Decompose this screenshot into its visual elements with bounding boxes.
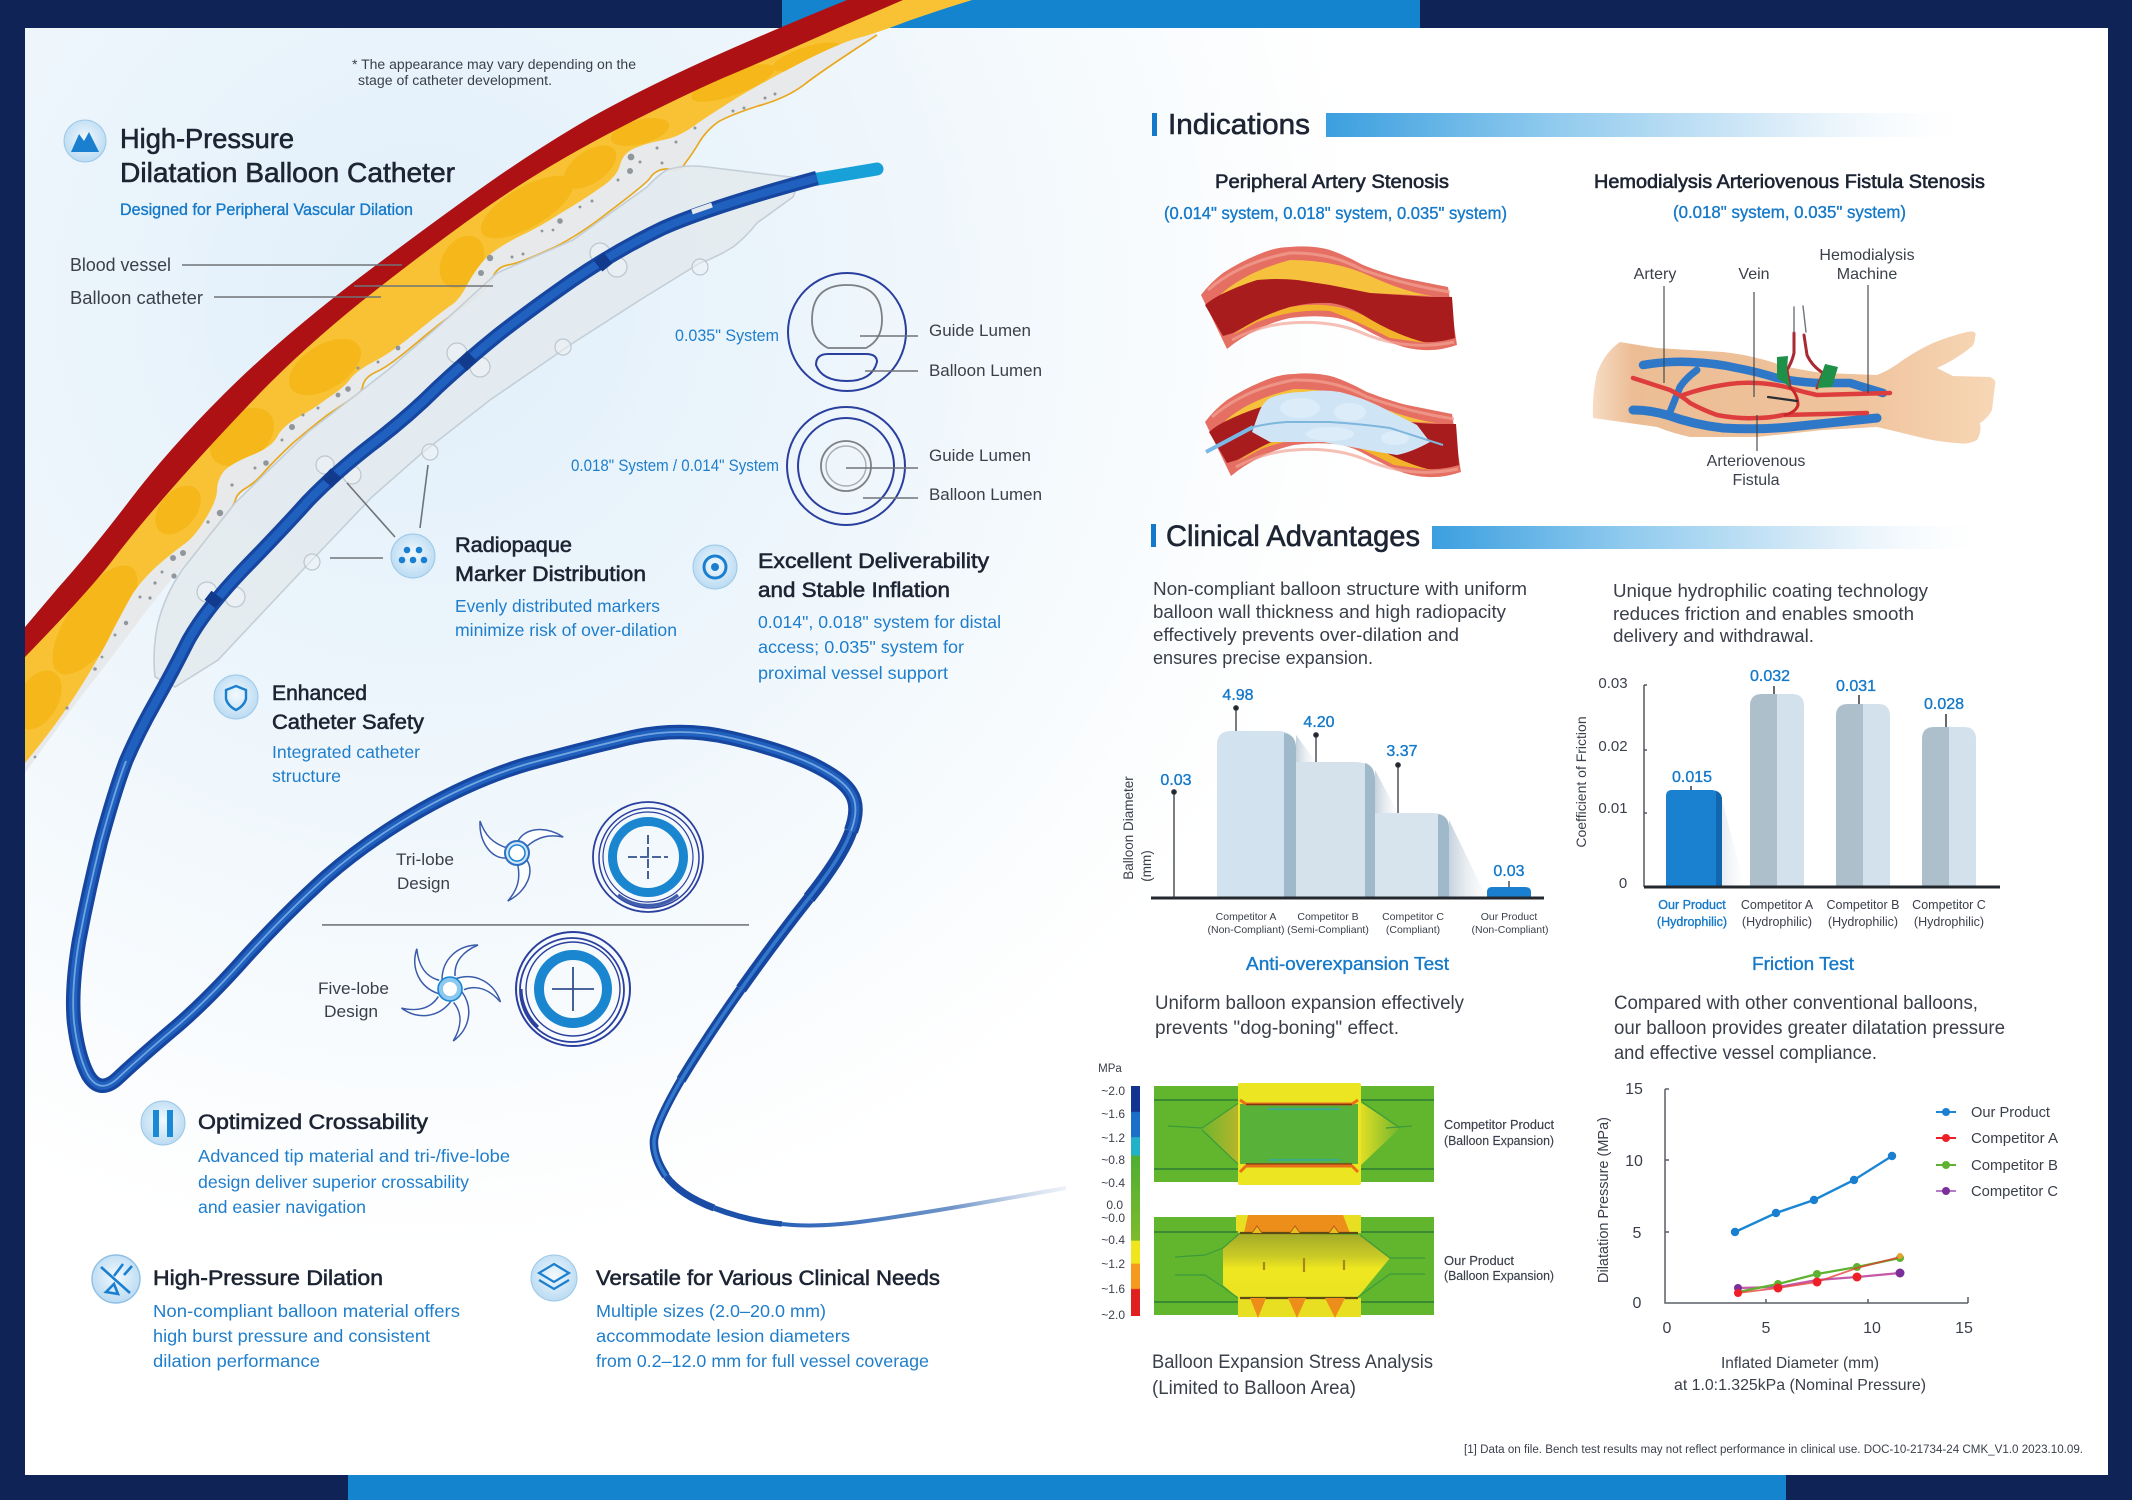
icon: five-lobe balloon disc: [516, 932, 630, 1046]
value labels: 0.028: [1924, 696, 1964, 713]
axis numbers: 15: [1625, 1081, 1643, 1098]
bar shadow: [1722, 800, 1745, 887]
tri-lobe design: [396, 802, 703, 912]
axis numbers: 5: [1762, 1320, 1771, 1337]
label: competitor product: (Balloon Expansion): [1444, 1134, 1554, 1148]
bar: competitor A: [1217, 731, 1296, 898]
category labels: [1657, 898, 1986, 929]
icon: tri-lobe balloon disc: [593, 802, 703, 912]
text: dilatation pressure description: [1614, 993, 2005, 1064]
category labels: Our Product: [1658, 898, 1726, 912]
feature: radiopaque marker distribution: minimize risk of over-dilation: [455, 620, 677, 640]
feature: optimized crossability: [141, 1101, 510, 1217]
value labels: [1672, 668, 1964, 786]
heading: product name: Dilatation Balloon Catheter: [120, 157, 455, 188]
stress analysis: colour scale: MPa: [1098, 1063, 1122, 1075]
balloon markers: [197, 243, 708, 607]
text: dilatation pressure description: Compared with other conventional balloons,: [1614, 993, 1978, 1014]
arm labels: [1634, 247, 1915, 489]
cross section: 0.035 inch system: [675, 273, 1042, 391]
top blue bar: [782, 0, 1420, 29]
label: our product: [1444, 1254, 1554, 1283]
icon: parallel bars: [141, 1101, 185, 1145]
text: non-compliant description: Non-compliant balloon structure with uniform: [1153, 579, 1527, 599]
y axis label: Coefficient of Friction: [1573, 716, 1589, 848]
feature: radiopaque marker distribution: Marker Distribution: [455, 563, 646, 586]
feature: high-pressure dilation: [92, 1255, 460, 1371]
category labels: (Hydrophilic): [1914, 915, 1984, 929]
section heading: indications: Indications: [1168, 109, 1310, 141]
feature: excellent deliverability: [693, 545, 1001, 683]
bar shadows: [1296, 735, 1487, 898]
series: competitor C: [1734, 1268, 1904, 1292]
cross section: 0.018 / 0.014 inch system: Balloon Lumen: [929, 485, 1042, 504]
category labels: Our Product: [1481, 911, 1537, 923]
category labels: (Semi-Compliant): [1287, 924, 1369, 936]
five-lobe design: Design: [324, 1002, 378, 1021]
cross section: 0.035 inch system: Guide Lumen: [929, 321, 1031, 340]
category labels: (Hydrophilic): [1828, 915, 1898, 929]
stress analysis: colour scale: ~0.0: [1101, 1211, 1125, 1225]
illustration: forearm with fistula: [1593, 306, 1995, 444]
subtitle: Designed for Peripheral Vascular Dilation: [120, 200, 413, 219]
five-lobe design: [318, 932, 630, 1046]
axis numbers: 0: [1663, 1320, 1672, 1337]
category labels: Competitor B: [1297, 911, 1359, 923]
value labels: 0.03: [1160, 772, 1192, 789]
indication: peripheral artery stenosis: Peripheral Artery Stenosis: [1215, 172, 1449, 193]
catheter tip: [800, 169, 877, 182]
icon: mountains: [64, 120, 106, 162]
arm labels: Fistula: [1732, 472, 1780, 489]
feature: enhanced catheter safety: Integrated catheter: [272, 742, 420, 762]
icon: shield: [214, 675, 258, 719]
text: hydrophilic coating description: reduces friction and enables smooth: [1613, 604, 1914, 624]
category labels: (Compliant): [1386, 924, 1440, 936]
fat layer: [25, 0, 972, 763]
feature: excellent deliverability: access; 0.035" system for: [758, 637, 964, 657]
arm labels: Vein: [1738, 266, 1770, 283]
heading: product name: [120, 123, 455, 188]
x axis label: [1674, 1355, 1926, 1394]
feature: enhanced catheter safety: Catheter Safety: [272, 711, 425, 734]
stress analysis: competitor balloon heatmap: [1154, 1083, 1434, 1185]
tri-lobe design: Tri-lobe: [396, 850, 454, 869]
bar: our product: [1487, 887, 1531, 898]
bar chart: friction test: [1573, 668, 2000, 974]
series: competitor B: [1738, 1254, 1904, 1292]
callouts: blood vessel and balloon catheter labels: Balloon catheter: [70, 288, 203, 308]
value ticks: [1691, 686, 1946, 790]
feature: enhanced catheter safety: structure: [272, 766, 341, 786]
chart caption: Friction Test: [1752, 954, 1854, 974]
cross section: 0.035 inch system: Balloon Lumen: [929, 361, 1042, 380]
indication: hemodialysis arteriovenous fistula stenosis: (0.018" system, 0.035" system): [1673, 202, 1906, 222]
bar: competitor A: [1750, 694, 1804, 887]
feature: optimized crossability: and easier navigation: [198, 1197, 366, 1217]
legend: Competitor B: [1971, 1157, 2058, 1174]
text: non-compliant description: effectively prevents over-dilation and: [1153, 625, 1459, 645]
stress analysis: colour scale: [1098, 1063, 1140, 1322]
text: uniform expansion description: Uniform balloon expansion effectively: [1155, 993, 1464, 1014]
feature: optimized crossability: design deliver superior crossability: [198, 1172, 469, 1192]
x axis label: at 1.0:1.325kPa (Nominal Pressure): [1674, 1377, 1926, 1394]
text: non-compliant description: ensures precise expansion.: [1153, 648, 1373, 668]
y axis label: Balloon Diameter: [1121, 776, 1136, 880]
stress analysis: colour scale: ~1.6: [1101, 1107, 1125, 1121]
note: appearance disclaimer: [352, 57, 636, 88]
x axis label: Inflated Diameter (mm): [1721, 1355, 1879, 1372]
callouts: blood vessel and balloon catheter labels: Blood vessel: [70, 255, 171, 275]
arm labels: Hemodialysis: [1819, 247, 1915, 264]
cross section: 0.035 inch system: 0.035" System: [675, 326, 779, 345]
text: non-compliant description: balloon wall thickness and high radiopacity: [1153, 602, 1506, 622]
feature: versatile clinical needs: accommodate lesion diameters: [596, 1326, 850, 1346]
stress analysis: colour scale: ~1.2: [1101, 1257, 1125, 1271]
axis tick labels: 0.01: [1598, 800, 1628, 817]
label: our product: (Balloon Expansion): [1444, 1269, 1554, 1283]
title block: [64, 120, 455, 219]
caption: stress analysis: Balloon Expansion Stress Analysis: [1152, 1352, 1433, 1373]
heading: product name: High-Pressure: [120, 123, 294, 154]
axis numbers: [1625, 1081, 1973, 1337]
section heading: clinical advantages: Clinical Advantages: [1166, 520, 1420, 553]
bottom blue bar: [348, 1475, 1786, 1500]
axis tick labels: 0: [1619, 875, 1627, 892]
label: our product: Our Product: [1444, 1254, 1515, 1268]
arm labels: Arteriovenous: [1707, 453, 1805, 470]
value labels: 4.98: [1222, 687, 1254, 704]
five-lobe design: Five-lobe: [318, 979, 389, 998]
indication: hemodialysis arteriovenous fistula stenosis: Hemodialysis Arteriovenous Fistula Stenosis: [1594, 172, 1985, 193]
bar: competitor C: [1375, 813, 1449, 898]
section heading: clinical advantages: [1151, 520, 1982, 553]
text: hydrophilic coating description: Unique hydrophilic coating technology: [1613, 581, 1928, 601]
axes: [1644, 685, 2000, 888]
plaque dots: [34, 92, 777, 758]
label: competitor product: Competitor Product: [1444, 1118, 1555, 1132]
stress analysis: colour scale: 0.0: [1106, 1198, 1123, 1212]
plaque layer: [25, 0, 877, 773]
bar: competitor B: [1296, 762, 1375, 898]
stress analysis: colour scale: ~0.4: [1101, 1176, 1125, 1190]
feature: enhanced catheter safety: Enhanced: [272, 682, 367, 705]
category labels: Competitor A: [1741, 898, 1814, 912]
series: our product: [1731, 1152, 1896, 1236]
category labels: (Hydrophilic): [1742, 915, 1812, 929]
cross section: 0.018 / 0.014 inch system: 0.018" System / 0.014" System: [571, 456, 779, 475]
indication: hemodialysis arteriovenous fistula stenosis: [1593, 172, 1995, 489]
feature: versatile clinical needs: Versatile for Various Clinical Needs: [596, 1266, 940, 1290]
stress analysis: colour scale: ~0.4: [1101, 1233, 1125, 1247]
axes: [1665, 1089, 1968, 1303]
bar: competitor C: [1922, 727, 1976, 887]
feature: radiopaque marker distribution: Radiopaque: [455, 534, 572, 557]
illustration: artery with inflated balloon: [1205, 373, 1461, 477]
callouts: blood vessel and balloon catheter labels: [70, 255, 493, 308]
legend: Competitor A: [1971, 1130, 2058, 1147]
bar chart: anti-overexpansion test: [1121, 687, 1549, 974]
feature: versatile clinical needs: [531, 1255, 940, 1371]
stress analysis: colour scale: ~0.8: [1101, 1153, 1125, 1167]
footnote: [1] Data on file. Bench test results may not reflect performance in clinical use. DOC-10-21734-24 CMK_V1.0 2023.10.09.: [1464, 1444, 2083, 1456]
category labels: Competitor C: [1912, 898, 1986, 912]
text: uniform expansion description: [1155, 993, 1464, 1039]
icon: tri-lobe cross section: [480, 818, 563, 901]
feature: excellent deliverability: proximal vessel support: [758, 663, 948, 683]
stress analysis: colour scale: ~1.6: [1101, 1282, 1125, 1296]
series: competitor A: [1734, 1253, 1903, 1297]
indication: peripheral artery stenosis: [1164, 172, 1507, 477]
note: appearance disclaimer: * The appearance may vary depending on the: [352, 57, 636, 72]
indication: peripheral artery stenosis: (0.014" system, 0.018" system, 0.035" system): [1164, 203, 1507, 223]
vessel wall: [25, 0, 903, 657]
axis tick labels: [1598, 675, 1628, 892]
feature: versatile clinical needs: Multiple sizes (2.0–20.0 mm): [596, 1301, 826, 1321]
feature: enhanced catheter safety: [214, 675, 425, 786]
axis numbers: 15: [1955, 1320, 1973, 1337]
caption: stress analysis: (Limited to Balloon Area): [1152, 1378, 1356, 1399]
arm labels: Machine: [1837, 266, 1897, 283]
axis numbers: 10: [1625, 1153, 1643, 1170]
value markers: [1172, 706, 1509, 898]
value labels: 4.20: [1303, 714, 1335, 731]
y axis label: Dilatation Pressure (MPa): [1596, 1117, 1612, 1283]
category labels: [1207, 911, 1549, 936]
text: uniform expansion description: prevents "dog-boning" effect.: [1155, 1018, 1399, 1039]
feature: excellent deliverability: Excellent Deliverability: [758, 549, 989, 573]
feature: radiopaque marker distribution: [330, 465, 677, 640]
chart caption: Anti-overexpansion Test: [1246, 954, 1449, 974]
legend: Our Product: [1971, 1104, 2051, 1121]
catheter shaft body: [73, 178, 855, 1086]
y axis label: (mm): [1139, 850, 1154, 882]
label: competitor product: [1444, 1118, 1555, 1148]
axis tick labels: 0.03: [1598, 675, 1628, 692]
stress analysis: colour scale: ~2.0: [1101, 1308, 1125, 1322]
text: dilatation pressure description: our balloon provides greater dilatation pressure: [1614, 1018, 2005, 1039]
category labels: Competitor B: [1827, 898, 1899, 912]
line chart: dilatation pressure vs inflated diameter: [1596, 1081, 2058, 1394]
caption: stress analysis: [1152, 1352, 1433, 1399]
text: hydrophilic coating description: [1613, 581, 1928, 646]
category labels: Competitor A: [1216, 911, 1276, 923]
illustration: catheter shaft: [73, 169, 1066, 1225]
feature: optimized crossability: Advanced tip material and tri-/five-lobe: [198, 1146, 510, 1166]
value labels: 3.37: [1386, 743, 1418, 760]
axis numbers: 10: [1863, 1320, 1881, 1337]
category labels: Competitor C: [1382, 911, 1444, 923]
marker bands: [210, 258, 608, 604]
legend: Competitor C: [1971, 1183, 2058, 1200]
feature: versatile clinical needs: from 0.2–12.0 mm for full vessel coverage: [596, 1351, 929, 1371]
text: hydrophilic coating description: delivery and withdrawal.: [1613, 626, 1814, 646]
bar: competitor B: [1836, 704, 1890, 887]
tri-lobe design: Design: [397, 874, 450, 893]
y axis label: [1121, 776, 1154, 882]
category labels: (Non-Compliant): [1471, 924, 1549, 936]
illustration: stenosed artery: [1201, 246, 1457, 350]
cross section: 0.018 / 0.014 inch system: [571, 407, 1042, 525]
bar: our product: [1666, 790, 1722, 887]
axis numbers: 0: [1633, 1295, 1642, 1312]
feature: excellent deliverability: and Stable Inflation: [758, 578, 950, 602]
value labels: [1160, 687, 1525, 880]
cross section: 0.018 / 0.014 inch system: Guide Lumen: [929, 446, 1031, 465]
icon: pressure arrows: [92, 1255, 140, 1303]
feature: high-pressure dilation: Non-compliant balloon material offers: [153, 1301, 460, 1321]
text: non-compliant description: [1153, 579, 1527, 668]
value labels: 0.032: [1750, 668, 1790, 685]
icon: target: [693, 545, 737, 589]
axis tick labels: 0.02: [1598, 738, 1628, 755]
stress analysis: colour scale: ~1.2: [1101, 1131, 1125, 1145]
icon: marker dots: [391, 534, 435, 578]
feature: high-pressure dilation: dilation performance: [153, 1351, 320, 1371]
stress analysis: colour scale: ~2.0: [1101, 1084, 1125, 1098]
category labels: (Hydrophilic): [1657, 915, 1727, 929]
left frame edge: [0, 0, 25, 1500]
feature: radiopaque marker distribution: Evenly distributed markers: [455, 596, 660, 616]
catheter shaft tapering: [654, 831, 1066, 1225]
icon: five-lobe cross section: [401, 945, 500, 1041]
value labels: 0.031: [1836, 678, 1876, 695]
feature: excellent deliverability: 0.014", 0.018" system for distal: [758, 612, 1001, 632]
feature: high-pressure dilation: high burst pressure and consistent: [153, 1326, 430, 1346]
legend: [1936, 1104, 2058, 1200]
note: appearance disclaimer: stage of catheter development.: [358, 73, 552, 88]
balloon body: [154, 166, 800, 687]
arm labels: Artery: [1634, 266, 1676, 283]
icon: stacked layers: [531, 1255, 577, 1301]
divider between lobe designs: [322, 924, 749, 926]
text: dilatation pressure description: and effective vessel compliance.: [1614, 1043, 1877, 1064]
stress analysis: our product balloon heatmap: [1154, 1215, 1434, 1318]
feature: optimized crossability: Optimized Crossability: [198, 1110, 428, 1134]
value labels: 0.03: [1493, 863, 1525, 880]
category labels: (Non-Compliant): [1207, 924, 1285, 936]
illustration: blood vessel wall with plaque and balloon: [5, 0, 972, 773]
section heading: indications: [1152, 109, 1966, 141]
axis baseline: [1151, 896, 1544, 900]
axis numbers: 5: [1633, 1225, 1642, 1242]
feature: high-pressure dilation: High-Pressure Dilation: [153, 1266, 383, 1290]
value labels: 0.015: [1672, 769, 1712, 786]
orange boundary line: [213, 35, 877, 532]
